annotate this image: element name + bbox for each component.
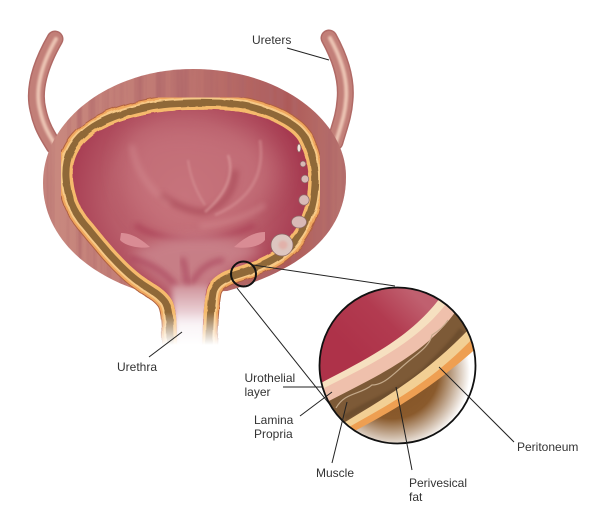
- label: Lamina Propria: Lamina: [254, 413, 293, 427]
- label: Peritoneum: Peritoneum: [517, 440, 578, 454]
- label: Muscle: Muscle: [316, 466, 354, 480]
- bladder outer muscle wall: [40, 65, 350, 300]
- panel: magnified wall inset: [318, 286, 476, 444]
- label: Lamina Propria: Propria: [254, 427, 293, 441]
- callout line: bottom of magnifier: [237, 288, 331, 406]
- icon: right ureteric orifice: [234, 232, 265, 248]
- label: Urethra: Urethra: [117, 360, 157, 374]
- bladder lumen interior: [72, 110, 308, 344]
- bladder wall layers: [73, 110, 308, 350]
- leader lines: [149, 48, 514, 470]
- panel: bladder cross-section: [43, 69, 346, 344]
- labels: [117, 33, 578, 504]
- inset circle outline: [320, 288, 476, 444]
- label: Urothelial layer: Urothelial: [244, 371, 295, 385]
- magnifier circle on bladder wall: [231, 262, 256, 286]
- icon: left ureteric orifice: [120, 233, 150, 248]
- callout line: top of magnifier: [253, 265, 395, 286]
- icon: right ureter: [329, 38, 346, 142]
- urethra fade to white: [145, 312, 235, 372]
- label: Perivesical fat: Perivesical: [409, 476, 467, 490]
- icon: left ureter: [36, 39, 56, 146]
- inset layers: [320, 288, 474, 443]
- label: Perivesical fat: fat: [409, 490, 423, 504]
- tumours growing on bladder wall: [271, 144, 309, 256]
- label: Ureters: Ureters: [252, 33, 291, 47]
- label: Urothelial layer: layer: [244, 385, 271, 399]
